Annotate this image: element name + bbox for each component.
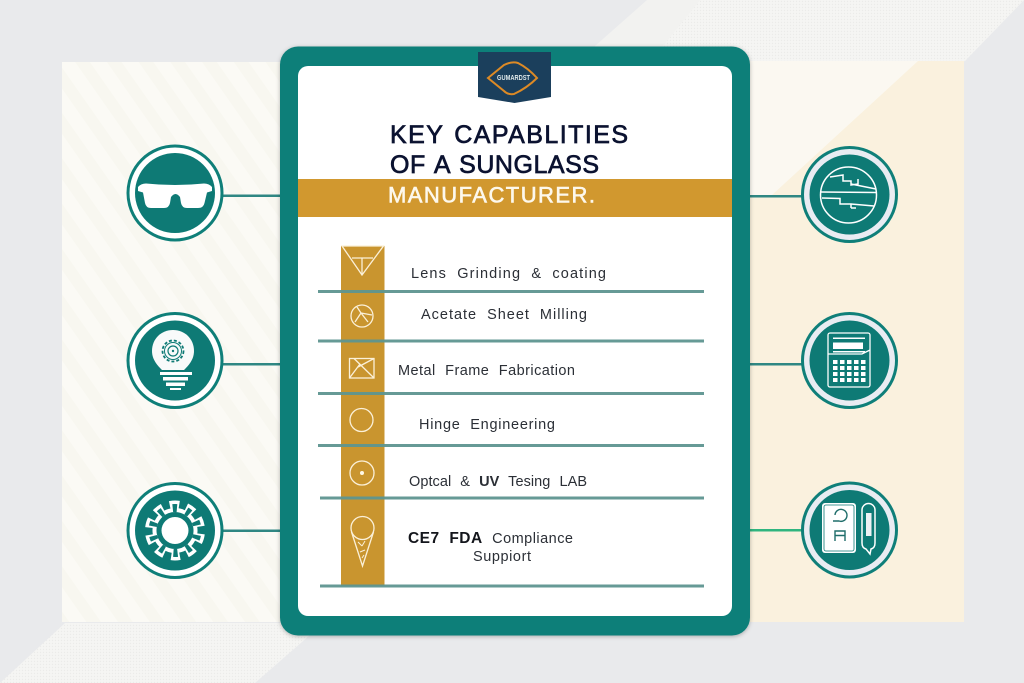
icon: calculator: [802, 314, 896, 408]
title: OF A SUNGLASS: [390, 151, 599, 179]
row icon: acetate circle: [351, 305, 373, 327]
row text: lens grinding: Lens Grinding & coating: [411, 266, 606, 282]
row icon: compliance cone: [351, 516, 374, 566]
icon: gear: [128, 484, 222, 578]
row text: compliance support: Suppiort: [473, 549, 531, 565]
row text: metal frame: Metal Frame Fabrication: [398, 363, 575, 379]
gold icon column: [341, 246, 384, 586]
logo badge: GUMARDST: [497, 75, 531, 82]
icon: light bulb with gear: [128, 314, 222, 408]
logo badge: [478, 52, 551, 103]
row icon: metal frame envelope: [350, 358, 374, 378]
row text: acetate milling: Acetate Sheet Milling: [421, 307, 587, 323]
title: MANUFACTURER.: [388, 182, 595, 208]
left panel: [62, 62, 282, 622]
row icon: hinge circle: [350, 408, 373, 432]
title: [388, 121, 628, 208]
gold title band: [298, 179, 732, 217]
row text: compliance support: CE7 FDA Compliance: [408, 530, 573, 547]
row icon: lens triangle: [342, 246, 384, 275]
main card: [280, 46, 750, 636]
row text: optical testing: Optcal & UV Tesing LAB: [409, 474, 587, 490]
connector lines: [222, 194, 802, 532]
row dividers: [318, 290, 704, 588]
title: KEY CAPABLITIES: [390, 121, 628, 149]
row text: compliance support: [408, 530, 573, 565]
row text: hinge engineering: Hinge Engineering: [419, 417, 555, 433]
row icon: testing target: [350, 461, 374, 485]
icon: notebook and pen: [802, 483, 896, 577]
icon: sunglasses: [128, 146, 222, 240]
right panel: [748, 61, 964, 622]
icon: lens globe: [802, 148, 896, 242]
